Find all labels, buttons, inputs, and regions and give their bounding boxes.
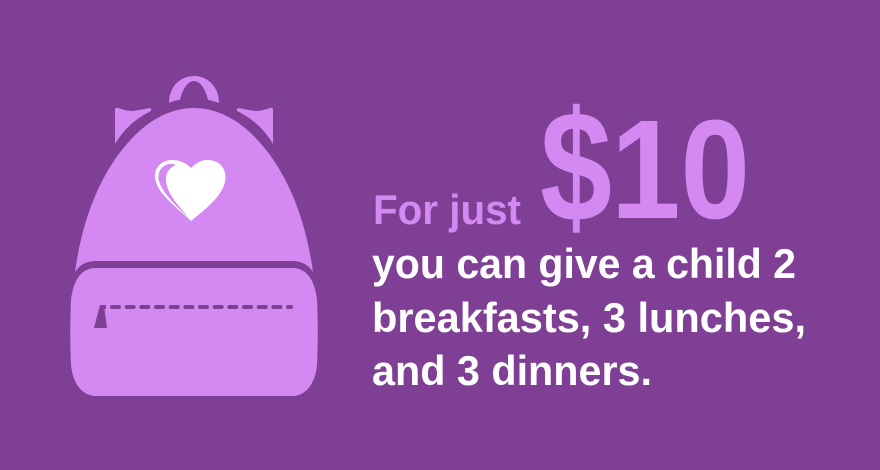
backpack body — [75, 108, 313, 272]
heart crescent highlight — [158, 164, 189, 218]
text: description — [372, 240, 806, 394]
icon: backpack — [70, 76, 318, 396]
line 1: you can give a child 2 — [372, 240, 796, 287]
text: for just: For just — [373, 186, 521, 233]
backpack handle — [169, 76, 219, 103]
line 2: breakfasts, 3 lunches, — [372, 294, 806, 341]
line 3: and 3 dinners. — [372, 347, 652, 394]
front pocket — [70, 268, 318, 396]
zipper pull — [94, 305, 107, 328]
dollar sign: $ — [540, 79, 612, 255]
right strap — [237, 108, 273, 144]
amount digits: 10 — [611, 90, 750, 248]
text: price — [540, 79, 750, 255]
icon: heart — [155, 160, 226, 221]
heart shape — [155, 160, 226, 221]
left strap — [115, 108, 151, 144]
zipper line — [112, 305, 291, 309]
